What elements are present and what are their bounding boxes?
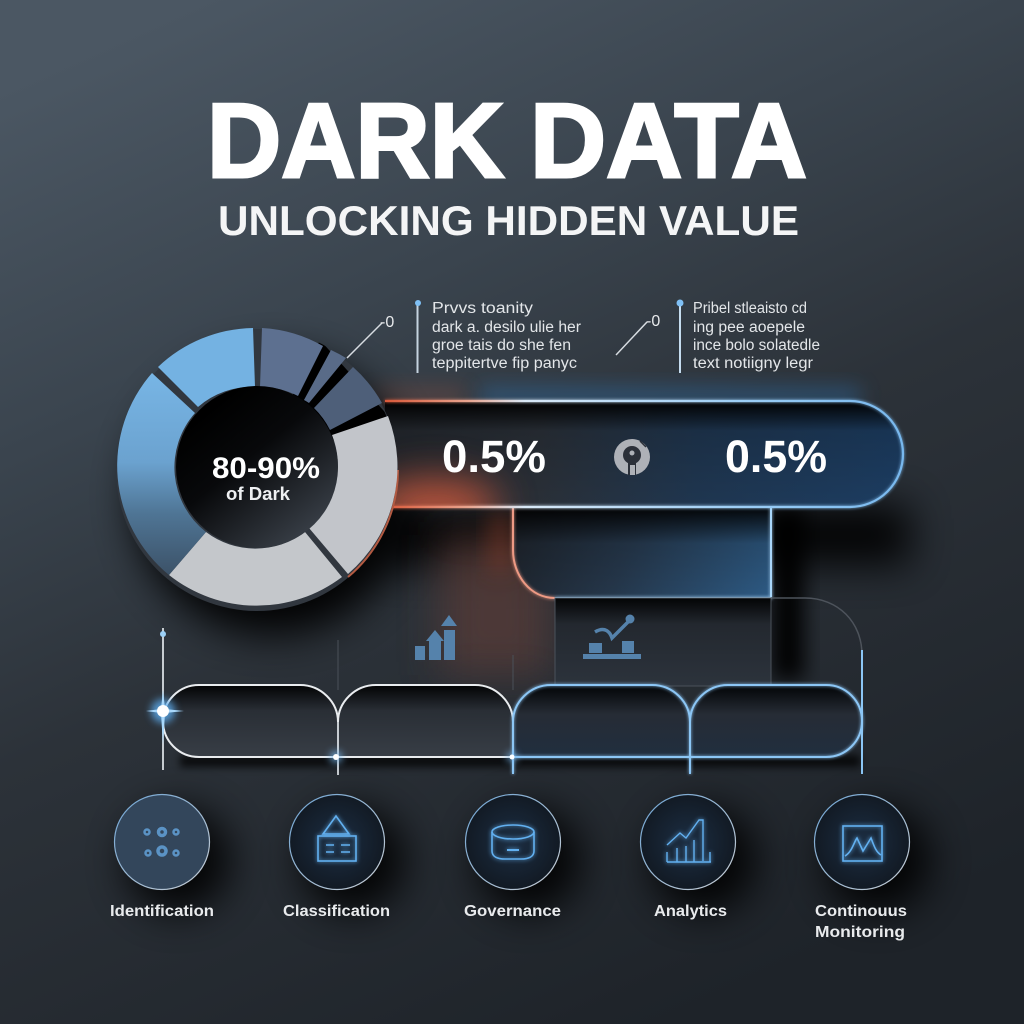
subtitle: UNLOCKING HIDDEN VALUE bbox=[218, 197, 799, 244]
donut caption: of Dark bbox=[226, 484, 291, 504]
chain cell 1 bbox=[163, 685, 338, 757]
callout: second leader bbox=[616, 313, 660, 355]
stat: left value: 0.5% bbox=[442, 431, 546, 482]
chain blue outline bbox=[513, 685, 862, 774]
icon: dots bbox=[144, 828, 178, 856]
callout: first leader bbox=[347, 314, 394, 358]
lower centre panel bbox=[555, 598, 771, 686]
callout: first note: groe tais do she fen bbox=[432, 337, 571, 354]
icon: trend on platform bbox=[583, 614, 641, 659]
atmospheric glows and cast shadows bbox=[132, 355, 910, 680]
callout: second note: Pribel stleaisto cd bbox=[693, 300, 807, 317]
callout: first leader: -0 bbox=[380, 314, 394, 331]
callout: first note: dark a. desilo ulie her bbox=[432, 319, 581, 336]
callout: second note: ing pee aoepele bbox=[693, 319, 805, 336]
stat bar bbox=[383, 397, 906, 511]
callout: second note: ince bolo solatedle bbox=[693, 337, 820, 354]
icon: tagged card bbox=[318, 816, 356, 861]
callout: second note bbox=[676, 300, 824, 373]
segment: dark slate thin bbox=[304, 350, 346, 403]
label: Analytics bbox=[654, 903, 727, 920]
blue connector lines bbox=[555, 507, 771, 598]
chain vertical markers bbox=[163, 628, 338, 775]
title: DATA bbox=[530, 82, 807, 200]
title: DARK bbox=[207, 82, 504, 200]
callout: first note bbox=[415, 300, 585, 373]
chain cell 2 bbox=[338, 685, 513, 757]
label: Continouus bbox=[815, 903, 907, 920]
callout: second leader: -0 bbox=[646, 313, 660, 330]
process chain bbox=[146, 628, 862, 775]
donut value: 80-90% bbox=[212, 452, 320, 485]
icon: line and bar chart bbox=[667, 820, 711, 862]
label: Governance bbox=[464, 903, 561, 920]
label: Classification bbox=[283, 903, 390, 920]
icon: rising bars bbox=[415, 615, 457, 660]
icon: monitoring frame bbox=[843, 826, 882, 861]
panel below stat bar bbox=[513, 507, 771, 598]
segment: dark slate medium bbox=[314, 367, 382, 430]
red connector line bbox=[513, 507, 555, 598]
label: Monitoring bbox=[815, 924, 905, 941]
stat: right value: 0.5% bbox=[725, 431, 827, 482]
segment: dark slate large bbox=[260, 328, 323, 396]
icon: centre keyhole dial bbox=[614, 439, 650, 475]
step: continuous monitoring bbox=[814, 794, 930, 941]
chain cell 3 bbox=[513, 685, 690, 757]
faint separators bbox=[338, 640, 513, 690]
chain white outline bbox=[163, 685, 513, 757]
step: identification bbox=[110, 794, 230, 920]
segment: blue left bbox=[117, 373, 206, 575]
icon: database bbox=[492, 825, 534, 859]
callout: first note: teppitertve fip panyc bbox=[432, 355, 577, 372]
label: Identification bbox=[110, 903, 214, 920]
segment: grey right bbox=[309, 416, 397, 574]
chain cell 4 bbox=[690, 685, 862, 757]
donut chart bbox=[116, 328, 398, 611]
step: analytics bbox=[640, 794, 756, 920]
marker: junction lights bbox=[330, 751, 517, 763]
dark connector to chain bbox=[771, 598, 862, 690]
step: governance bbox=[464, 794, 581, 920]
segment: grey bottom bbox=[169, 532, 342, 606]
stat bar red base line bbox=[392, 506, 513, 508]
marker: left flare bbox=[146, 631, 184, 745]
segment: blue top bbox=[158, 328, 255, 407]
stat bar outline bbox=[385, 401, 903, 507]
callout: second note: text notiigny legr bbox=[693, 355, 813, 372]
step: classification bbox=[283, 794, 405, 920]
callout: first note: Prvvs toanity bbox=[432, 300, 533, 317]
chain shadow bbox=[180, 755, 860, 767]
donut centre bbox=[176, 386, 338, 548]
